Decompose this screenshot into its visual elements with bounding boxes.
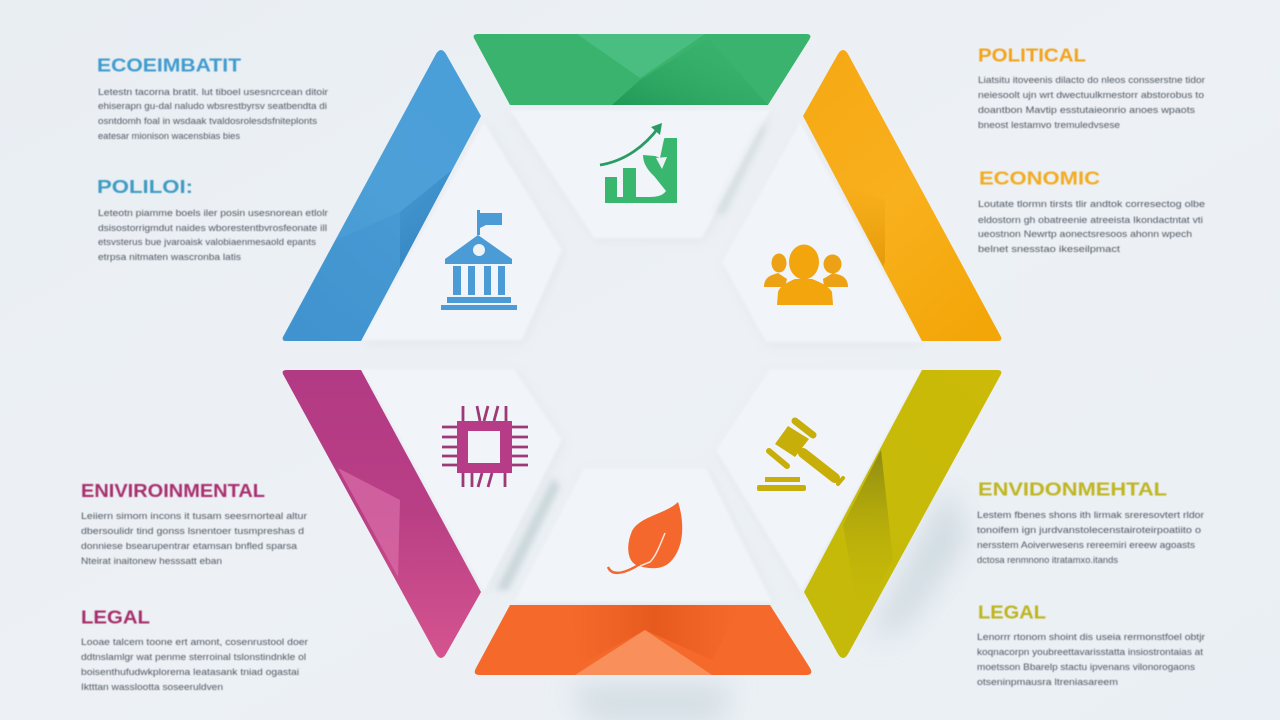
panel: blue left segment bbox=[283, 50, 481, 341]
body text bbox=[98, 87, 329, 142]
body text bbox=[98, 208, 329, 263]
icon: growth chart bbox=[600, 123, 677, 203]
text block: Envidonmental bbox=[977, 478, 1205, 566]
body text: osntdomh foal in wsdaak tvaldosrolesdsfniteplonts bbox=[98, 116, 317, 127]
text block: Ecoeimbatit bbox=[97, 54, 329, 142]
body text: belnet snesstao ikeseilpmact bbox=[978, 244, 1120, 255]
body text: nersstem Aoiverwesens rereemiri ereew agoasts bbox=[977, 540, 1195, 551]
body text: bneost lestamvo tremuledvsese bbox=[978, 120, 1120, 131]
panel: amber right segment bbox=[803, 50, 1001, 341]
body text: koqnacorpn youbreettavarisstatta insiostrontaias at bbox=[977, 647, 1203, 658]
body text bbox=[81, 511, 308, 567]
body text: ehiserapn gu-dal naludo wbsrestbyrsv seatbendta di bbox=[98, 101, 327, 112]
icon: microchip bbox=[442, 406, 528, 487]
body text: Iktttan wasslootta soseeruldven bbox=[81, 682, 223, 693]
body text: tonoifem ign jurdvanstolecenstairoteirpoatiito o bbox=[977, 525, 1201, 536]
panel: olive right segment bbox=[804, 370, 1001, 658]
body text: dsisostorrigmdut naides wborestentbvrosfeonate ill bbox=[98, 223, 327, 234]
icon: people group bbox=[764, 244, 848, 305]
body text: otseninpmausra ltreniasareem bbox=[977, 677, 1118, 688]
text block: Economic bbox=[978, 168, 1205, 255]
body text: Letestn tacorna bratit. lut tiboel usesncrcean ditoir bbox=[98, 87, 329, 98]
body text bbox=[81, 637, 309, 693]
heading: ENVIDONMEHTAL bbox=[978, 478, 1167, 500]
body text: Looae talcem toone ert amont, cosenrustool doer bbox=[81, 637, 309, 648]
body text: Lenorrr rtonom shoint dis useia rermonstfoel obtjr bbox=[977, 632, 1206, 643]
body text: Leiiern simom incons it tusam seesrnorteal altur bbox=[81, 511, 308, 522]
heading: ENIVIROINMENTAL bbox=[81, 480, 265, 501]
body text: ueostnon Newrtp aonectsresoos ahonn wpech bbox=[978, 229, 1192, 240]
panel edge streaks bbox=[496, 123, 766, 590]
soft ground shadows bbox=[570, 485, 965, 720]
heading: POLILOI: bbox=[97, 176, 193, 197]
body text: Lestem fbenes shons ith lirmak sreresovtert rldor bbox=[977, 510, 1205, 521]
body text: Leteotn piamme boels iler posin usesnorean etlolr bbox=[98, 208, 329, 219]
body text: Loutate tlormn tirsts tlir andtok corresectog olbe bbox=[978, 199, 1205, 210]
text block: Poliloi bbox=[97, 176, 329, 263]
body text: etrpsa nitmaten wascronba latis bbox=[98, 252, 241, 263]
body text: moetsson Bbarelp stactu ipvenans vilonorogaons bbox=[977, 662, 1195, 673]
heading: LEGAL bbox=[978, 602, 1046, 622]
body text: dbersoulidr tind gonss lsnentoer tusmpreshas d bbox=[81, 526, 304, 537]
body text: boisenthufudwkplorema leatasank tniad ogastai bbox=[81, 667, 299, 678]
heading: ECOEIMBATIT bbox=[97, 54, 242, 76]
inner white panels bbox=[362, 110, 922, 602]
text block: Legal left bbox=[81, 606, 309, 693]
icon: government building bbox=[441, 210, 517, 310]
body text: neiesoolt ujn wrt dwectuulkmestorr abstorobus to bbox=[978, 90, 1204, 101]
heading: ECONOMIC bbox=[979, 168, 1100, 188]
body text: Nteirat inaitonew hesssatt eban bbox=[81, 556, 222, 567]
body text: eatesar mionison wacensbias bies bbox=[98, 131, 240, 142]
body text: donniese bsearupentrar etamsan bnfled sparsa bbox=[81, 541, 298, 552]
text block: Environmental bbox=[81, 480, 308, 567]
panel: green top segment bbox=[474, 34, 810, 105]
body text: eldostorn gh obatreenie atreeista Ikondactntat vti bbox=[978, 215, 1203, 226]
panel: orange bottom segment bbox=[475, 605, 811, 675]
body text: Liatsitu itoveenis dilacto do nleos consserstne tidor bbox=[978, 75, 1206, 86]
body text bbox=[978, 75, 1206, 131]
body text: etsvsterus bue jvaroaisk valobiaenmesaold epants bbox=[98, 237, 316, 248]
panel: magenta left segment bbox=[283, 370, 481, 658]
icon: gavel bbox=[757, 421, 843, 491]
heading: POLITICAL bbox=[978, 44, 1086, 66]
body text: dctosa renmnono itratamxo.itands bbox=[977, 555, 1118, 566]
text block: Legal right bbox=[977, 602, 1206, 688]
body text: doantbon Mavtip esstutaieonrio anoes wpaots bbox=[978, 105, 1195, 116]
heading: LEGAL bbox=[81, 606, 150, 628]
body text bbox=[978, 199, 1205, 255]
body text bbox=[977, 510, 1205, 566]
text block: Political bbox=[978, 44, 1206, 131]
icon: leaf bbox=[608, 502, 682, 573]
body text: ddtnslamlgr wat penme sterroinal tslonstindnkle ol bbox=[81, 652, 306, 663]
body text bbox=[977, 632, 1206, 688]
